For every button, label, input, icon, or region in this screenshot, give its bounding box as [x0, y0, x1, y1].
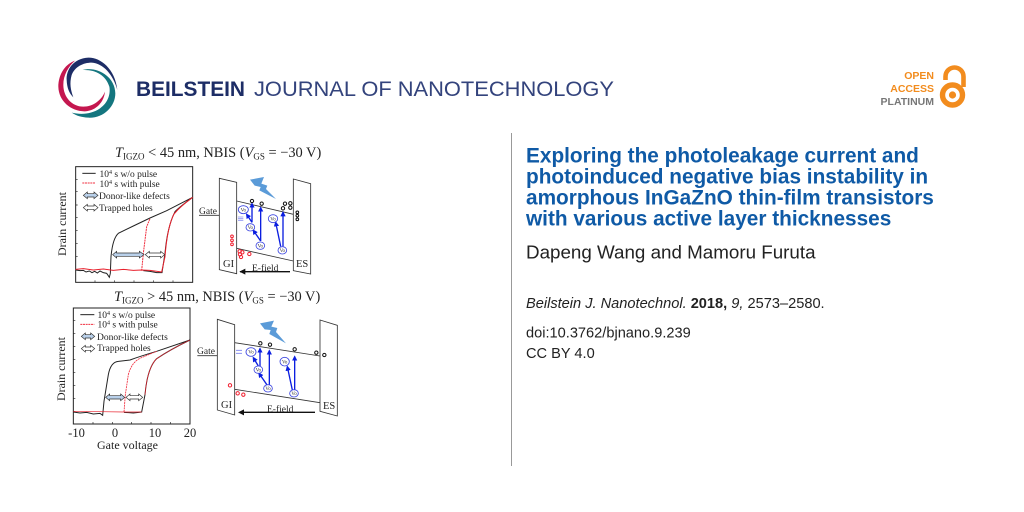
legend text: s w/o pulse — [110, 311, 155, 321]
oxygen vacancy states — [246, 348, 298, 397]
journal name: JOURNAL OF NANOTECHNOLOGY — [254, 77, 614, 101]
icon: light bolt — [260, 321, 286, 343]
badge text: OPEN — [904, 70, 934, 82]
band diagram labels: Gate — [197, 347, 215, 357]
logo: Beilstein swirl — [58, 58, 117, 118]
black curve — [73, 340, 190, 415]
red baseline curve — [73, 340, 190, 412]
x axis tick labels: 0 — [112, 426, 118, 440]
band diagram labels — [197, 347, 335, 415]
black curve — [76, 197, 193, 277]
legend text: 4 — [109, 170, 112, 176]
heading: thick layer: = −30 V) — [264, 289, 320, 305]
x axis tick labels: -10 — [68, 426, 85, 440]
band diagram labels: GI — [221, 400, 233, 411]
band diagram labels — [199, 207, 308, 274]
vacancy labels: Vo — [241, 208, 247, 213]
span arrows — [106, 394, 125, 401]
legend text: s with pulse — [112, 180, 160, 190]
icon: light bolt — [250, 177, 276, 199]
heading: thin layer: GS — [253, 152, 265, 162]
band diagram: thick layer — [197, 319, 337, 416]
vacancy labels: Vo — [270, 217, 276, 222]
badge text — [881, 70, 934, 108]
legend lines — [82, 172, 96, 175]
heading: thin layer: = −30 V) — [265, 145, 321, 161]
panel: upper graphic, thin layer — [55, 145, 321, 282]
legend text: 4 — [107, 311, 110, 317]
article title — [525, 144, 934, 230]
span arrows — [113, 251, 144, 258]
vacancy labels: Vo — [248, 351, 254, 356]
chart: drain current, thick layer — [73, 308, 190, 424]
legend text: Trapped holes — [99, 204, 153, 214]
electrons — [259, 342, 326, 357]
heading: thin layer: < 45 nm, NBIS ( — [145, 145, 245, 161]
vacancy labels: Vo — [248, 226, 254, 231]
legend arrows — [83, 192, 98, 199]
vacancy labels: Vo — [256, 368, 262, 373]
electrons — [250, 199, 299, 221]
x axis tick labels — [68, 426, 196, 440]
legend lines — [80, 313, 94, 316]
legend text: 10 — [98, 311, 107, 321]
legend text: Donor-like defects — [99, 191, 170, 202]
band diagram labels: E-field — [252, 263, 279, 274]
red dashed curve — [124, 351, 157, 412]
divider — [510, 133, 512, 466]
heading: thick layer: > 45 nm, NBIS ( — [144, 289, 244, 305]
red solid curve — [76, 197, 193, 272]
y axis label: Drain current — [55, 191, 69, 256]
legend text — [99, 170, 170, 214]
authors: Dapeng Wang and Mamoru Furuta — [526, 242, 816, 262]
oxygen vacancy states — [238, 206, 287, 254]
heading: thin layer: T — [115, 145, 124, 161]
badge text: ACCESS — [890, 83, 934, 95]
vacancy labels: Vo — [282, 360, 288, 365]
holes — [231, 235, 251, 259]
heading: thick layer: T — [114, 289, 123, 305]
citation: Beilstein J. Nanotechnol. 2018, 9, 2573–2580. — [526, 296, 825, 312]
vacancy labels: Vo — [258, 244, 264, 249]
excitation arrows — [253, 349, 295, 390]
license: CC BY 4.0 — [526, 346, 595, 362]
band diagram labels: GI — [223, 259, 235, 270]
holes — [228, 384, 245, 396]
band diagram labels: Gate — [199, 207, 217, 217]
legend text: s w/o pulse — [112, 170, 157, 180]
journal name: BEILSTEIN — [136, 77, 245, 101]
heading: thick layer: GS — [252, 296, 264, 306]
vacancy labels: Vo — [291, 392, 297, 397]
legend text: 10 — [98, 320, 107, 330]
legend text: 4 — [107, 320, 110, 326]
y axis label: Drain current — [54, 336, 68, 401]
legend text: 10 — [100, 170, 109, 180]
legend text: 10 — [100, 180, 109, 190]
legend text — [97, 311, 168, 354]
band diagram: thin layer — [199, 177, 311, 275]
badge text: PLATINUM — [881, 96, 934, 108]
chart: drain current, thin layer — [76, 167, 193, 282]
doi: doi:10.3762/bjnano.9.239 — [526, 326, 691, 342]
x axis label: Gate voltage — [97, 438, 158, 452]
band diagram labels: E-field — [267, 404, 294, 415]
legend text: Trapped holes — [97, 344, 151, 354]
x axis tick labels: 20 — [184, 426, 196, 440]
article title: Exploring the photoleakage current and — [526, 144, 919, 168]
legend arrows — [81, 333, 95, 340]
excitation arrows — [247, 204, 283, 246]
panel: lower graphic, thick layer — [54, 289, 337, 452]
vacancy labels: Vo — [280, 249, 286, 254]
vacancy labels — [241, 208, 286, 254]
article title: with various active layer thicknesses — [525, 208, 891, 230]
red dashed curve — [142, 219, 150, 271]
band diagram labels: ES — [296, 259, 308, 270]
legend text: 4 — [109, 180, 112, 186]
heading: thin layer: IGZO — [123, 152, 145, 162]
band diagram labels: ES — [323, 401, 335, 412]
legend text: s with pulse — [110, 320, 158, 330]
heading: thin layer: V — [245, 145, 256, 161]
legend text: Donor-like defects — [97, 332, 168, 343]
article title: amorphous InGaZnO thin-film transistors — [526, 186, 934, 210]
heading: thick layer: IGZO — [122, 296, 144, 306]
icon: open padlock — [942, 68, 964, 105]
heading: thick layer: V — [244, 289, 255, 305]
article title: photoinduced negative bias instability in — [526, 166, 928, 188]
open access badge — [881, 68, 964, 108]
vacancy labels: Vo — [265, 387, 271, 392]
x axis tick labels: 10 — [149, 426, 161, 440]
vacancy labels — [248, 351, 297, 397]
